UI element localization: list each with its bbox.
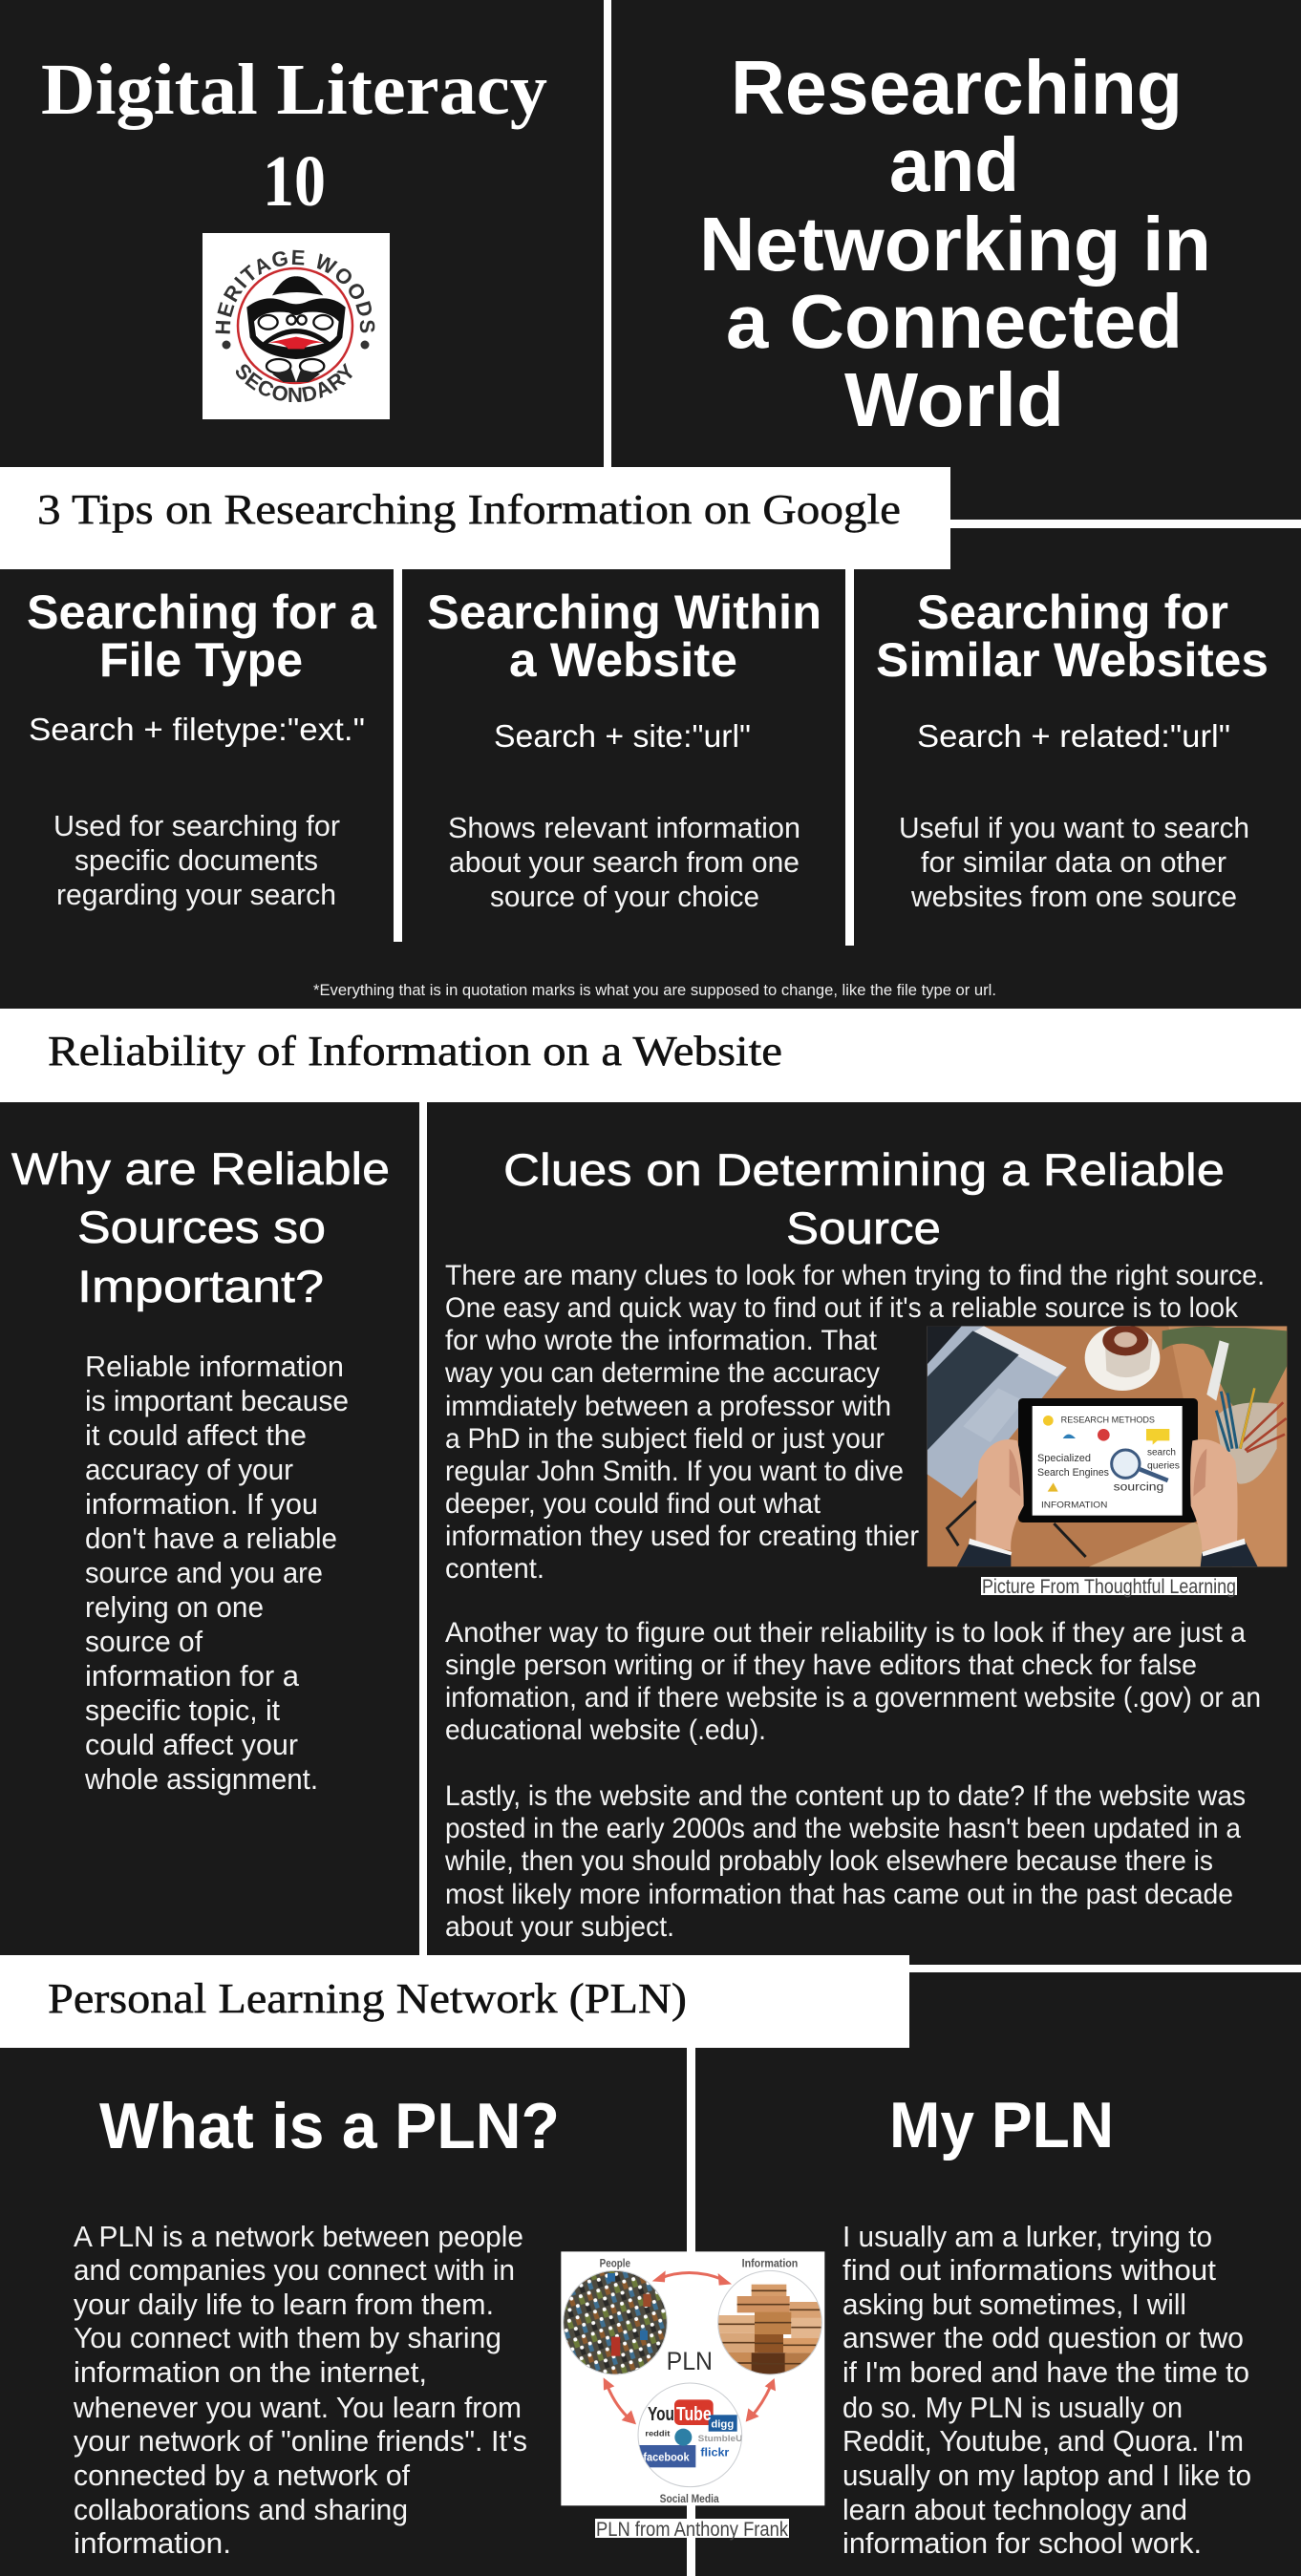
heading xyxy=(503,1144,1225,1253)
description: websites from one source xyxy=(910,880,1237,913)
body text: connected by a network of xyxy=(74,2459,410,2492)
picture caption: Anthony Frank: PLN from Anthony Frank xyxy=(596,2519,788,2541)
body text: I usually am a lurker, trying to xyxy=(842,2220,1212,2253)
body text: information for a xyxy=(85,1659,300,1692)
heading: Important? xyxy=(77,1261,324,1311)
logo lettering xyxy=(216,250,374,402)
picture: research methods tablet on desk xyxy=(928,1325,1287,1566)
tablet screen lettering: sourcing xyxy=(1114,1480,1163,1494)
heading: Digital Literacy 10 xyxy=(41,50,547,222)
description: Useful if you want to search xyxy=(899,811,1249,844)
description: source of your choice xyxy=(490,880,759,913)
logo lettering: HERITAGE WOODS xyxy=(216,250,374,334)
body text xyxy=(84,1350,349,1796)
paragraph 1: way you can determine the accuracy xyxy=(444,1357,880,1389)
body text: whole assignment. xyxy=(84,1762,318,1796)
tablet screen lettering: RESEARCH METHODS xyxy=(1061,1415,1155,1424)
social media circle xyxy=(638,2383,743,2487)
paragraph 2: infomation, and if there website is a government website (.gov) or an xyxy=(445,1682,1261,1714)
search syntax: Search + related:"url" xyxy=(917,718,1230,754)
social media logos: facebook xyxy=(643,2451,690,2464)
main title: World xyxy=(844,357,1064,442)
heading: Source xyxy=(786,1203,941,1253)
heading xyxy=(427,585,821,687)
body text: it could affect the xyxy=(85,1418,307,1452)
header divider xyxy=(604,0,611,467)
diagram: PLN people, information, social media xyxy=(561,2251,824,2505)
social media logos xyxy=(644,2406,741,2460)
tablet screen lettering: queries xyxy=(1147,1461,1180,1472)
search syntax: Search + site:"url" xyxy=(494,718,751,754)
social media logos: reddit xyxy=(645,2429,670,2438)
heading: What is a PLN? xyxy=(99,2090,560,2162)
section banner: 3 Tips xyxy=(0,467,1301,569)
heading xyxy=(11,1143,390,1311)
body text: Reliable information xyxy=(85,1350,344,1383)
footnote: *Everything that is in quotation marks is what you are supposed to change, like the file type or url. xyxy=(313,981,996,999)
search syntax: Search + filetype:"ext." xyxy=(29,712,365,747)
paragraph 3: about your subject. xyxy=(445,1911,674,1943)
body text: could affect your xyxy=(85,1728,298,1761)
diagram labels: People xyxy=(600,2256,630,2269)
paragraph 1: information they used for creating thier xyxy=(445,1521,919,1552)
body text: source of xyxy=(85,1625,203,1658)
body text: A PLN is a network between people xyxy=(74,2220,523,2253)
tablet screen lettering: Specialized xyxy=(1037,1453,1091,1464)
body text: find out informations without xyxy=(842,2253,1216,2287)
panel: what is a PLN xyxy=(73,2090,560,2560)
section banner: PLN xyxy=(0,1955,1301,2048)
body text: information on the internet, xyxy=(74,2355,427,2389)
body text: information. xyxy=(74,2526,231,2560)
section banner: reliability: Reliability of Information on a Website xyxy=(48,1028,782,1075)
tablet screen lettering: INFORMATION xyxy=(1041,1500,1107,1509)
paragraph 1: immdiately between a professor with xyxy=(445,1391,891,1422)
panel: why reliable sources matter xyxy=(11,1143,390,1796)
heading xyxy=(27,585,377,687)
description: Shows relevant information xyxy=(448,811,800,844)
section banner: 3 Tips: 3 Tips on Researching Information on Google xyxy=(37,486,901,533)
heading: Why are Reliable xyxy=(11,1143,390,1194)
heading: Digital Literacy 10: Digital Literacy xyxy=(41,50,547,130)
tip column dividers xyxy=(394,569,854,946)
books circle xyxy=(718,2270,823,2375)
heading: Searching for a xyxy=(27,585,377,639)
logo: Heritage Woods Secondary xyxy=(203,233,390,419)
panel: searching within a website xyxy=(427,585,821,913)
heading: Sources so xyxy=(77,1202,326,1252)
body text: if I'm bored and have the time to xyxy=(842,2355,1249,2389)
body text: asking but sometimes, I will xyxy=(842,2288,1186,2321)
paragraph 2: Another way to figure out their reliability is to look if they are just a xyxy=(445,1617,1246,1649)
panel: searching for similar websites xyxy=(876,585,1269,913)
body text: Reddit, Youtube, and Quora. I'm xyxy=(842,2424,1244,2458)
body text xyxy=(842,2220,1251,2560)
paragraph 2 xyxy=(445,1617,1261,1746)
social media logos: digg xyxy=(711,2418,734,2430)
main title: a Connected xyxy=(726,279,1183,364)
body text: source and you are xyxy=(85,1556,323,1589)
paragraph 1: deeper, you could find out what xyxy=(445,1488,821,1520)
logo lettering: SECONDARY xyxy=(235,363,352,402)
picture caption: thoughtful learning: Picture From Thoughtful Learning xyxy=(982,1576,1236,1598)
main title: and xyxy=(889,122,1019,207)
diagram labels: Information xyxy=(742,2256,798,2269)
body text: information. If you xyxy=(85,1487,318,1521)
logo face xyxy=(246,276,346,382)
heading: Digital Literacy 10: 10 xyxy=(263,141,326,222)
body text: your daily life to learn from them. xyxy=(74,2288,494,2321)
paragraph 1: for who wrote the information. That xyxy=(445,1325,878,1356)
tablet screen lettering: Search Engines xyxy=(1037,1467,1109,1479)
description xyxy=(448,811,800,913)
social media logos: StumbleU xyxy=(698,2434,743,2443)
paragraph 3 xyxy=(444,1780,1246,1943)
description: regarding your search xyxy=(56,878,336,911)
diagram labels: PLN xyxy=(667,2347,713,2375)
body text: don't have a reliable xyxy=(85,1522,337,1555)
social media logos: You xyxy=(648,2403,674,2425)
paragraph 3: most likely more information that has came out in the past decade xyxy=(445,1879,1233,1910)
heading: Searching for xyxy=(917,585,1228,639)
description: specific documents xyxy=(75,843,318,877)
social media logos: flickr xyxy=(700,2445,730,2459)
body text: information for school work. xyxy=(842,2526,1202,2560)
description: for similar data on other xyxy=(921,845,1226,879)
body text: answer the odd question or two xyxy=(842,2321,1244,2354)
heading: My PLN xyxy=(889,2089,1114,2161)
section banner: PLN: Personal Learning Network (PLN) xyxy=(48,1975,687,2022)
body text: relying on one xyxy=(85,1590,264,1624)
paragraph 1: One easy and quick way to find out if it's a reliable source is to look xyxy=(445,1292,1239,1324)
body text: collaborations and sharing xyxy=(74,2493,408,2526)
heading: File Type xyxy=(99,633,303,687)
heading: Clues on Determining a Reliable xyxy=(503,1144,1225,1195)
body text: learn about technology and xyxy=(842,2493,1187,2526)
heading: Similar Websites xyxy=(876,633,1269,687)
body text: specific topic, it xyxy=(85,1693,280,1727)
paragraph 1: a PhD in the subject field or just your xyxy=(445,1423,885,1455)
heading: a Website xyxy=(509,633,737,687)
body text: do so. My PLN is usually on xyxy=(842,2391,1183,2424)
main title: Networking in xyxy=(699,202,1211,287)
body text: is important because xyxy=(85,1384,349,1417)
paragraph 1: There are many clues to look for when trying to find the right source. xyxy=(445,1260,1265,1291)
paragraph 1: content. xyxy=(445,1553,544,1585)
red arrows xyxy=(608,2273,771,2419)
paragraph 3: Lastly, is the website and the content up to date? If the website was xyxy=(445,1780,1246,1812)
body text: and companies you connect with in xyxy=(74,2253,515,2287)
tablet screen lettering xyxy=(1037,1415,1180,1509)
paragraph 3: posted in the early 2000s and the website hasn't been updated in a xyxy=(445,1813,1241,1844)
body text: usually on my laptop and I like to xyxy=(842,2459,1251,2492)
paragraph 3: while, then you should probably look elsewhere because there is xyxy=(444,1845,1213,1877)
main title: Researching xyxy=(731,45,1183,130)
paragraph 1: regular John Smith. If you want to dive xyxy=(445,1456,904,1487)
paragraph 1 xyxy=(444,1260,1265,1585)
paragraph 2: educational website (.edu). xyxy=(445,1714,766,1746)
panel: clues on determining a reliable source xyxy=(444,1144,1265,1943)
diagram labels: Social Media xyxy=(660,2492,719,2505)
description: about your search from one xyxy=(449,845,800,879)
PLN column divider xyxy=(687,2048,695,2576)
reliability column divider xyxy=(419,1102,427,1955)
paragraph 2: single person writing or if they have editors that check for false xyxy=(445,1650,1197,1681)
description: Used for searching for xyxy=(53,809,340,842)
body text xyxy=(73,2220,527,2560)
description xyxy=(899,811,1249,913)
panel: searching for a file type xyxy=(27,585,377,911)
people circle xyxy=(563,2269,668,2374)
main title xyxy=(699,45,1211,442)
body text: You connect with them by sharing xyxy=(74,2321,501,2354)
tablet screen lettering: search xyxy=(1147,1447,1176,1458)
heading: Searching Within xyxy=(427,585,821,639)
description xyxy=(53,809,340,911)
body text: whenever you want. You learn from xyxy=(73,2391,522,2424)
social media logos: Tube xyxy=(676,2403,712,2425)
heading xyxy=(876,585,1269,687)
body text: your network of "online friends". It's xyxy=(74,2424,527,2458)
body text: accuracy of your xyxy=(85,1453,293,1486)
panel: my PLN xyxy=(842,2089,1251,2560)
section banner: reliability xyxy=(0,1009,1301,1102)
diagram labels xyxy=(600,2256,798,2505)
